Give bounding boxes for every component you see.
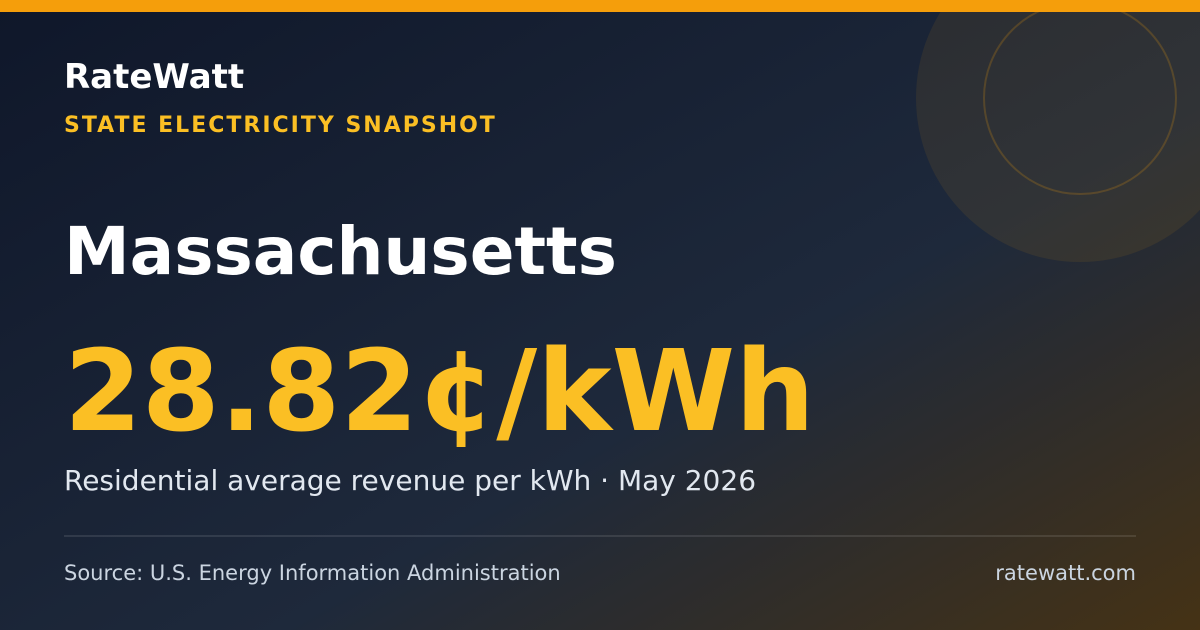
state name: Massachusetts [64, 213, 617, 290]
subtitle: STATE ELECTRICITY SNAPSHOT [64, 113, 497, 138]
brand name: RateWatt [64, 57, 244, 97]
rate description: Residential average revenue per kWh · May 2026 [64, 464, 756, 497]
footer divider [64, 535, 1136, 537]
top accent bar [0, 0, 1200, 12]
decorative ring [983, 1, 1177, 195]
rate value: 28.82¢/kWh [64, 327, 815, 457]
decorative large circle [916, 0, 1200, 262]
site url: ratewatt.com [995, 561, 1136, 585]
source note: Source: U.S. Energy Information Administration [64, 561, 561, 585]
